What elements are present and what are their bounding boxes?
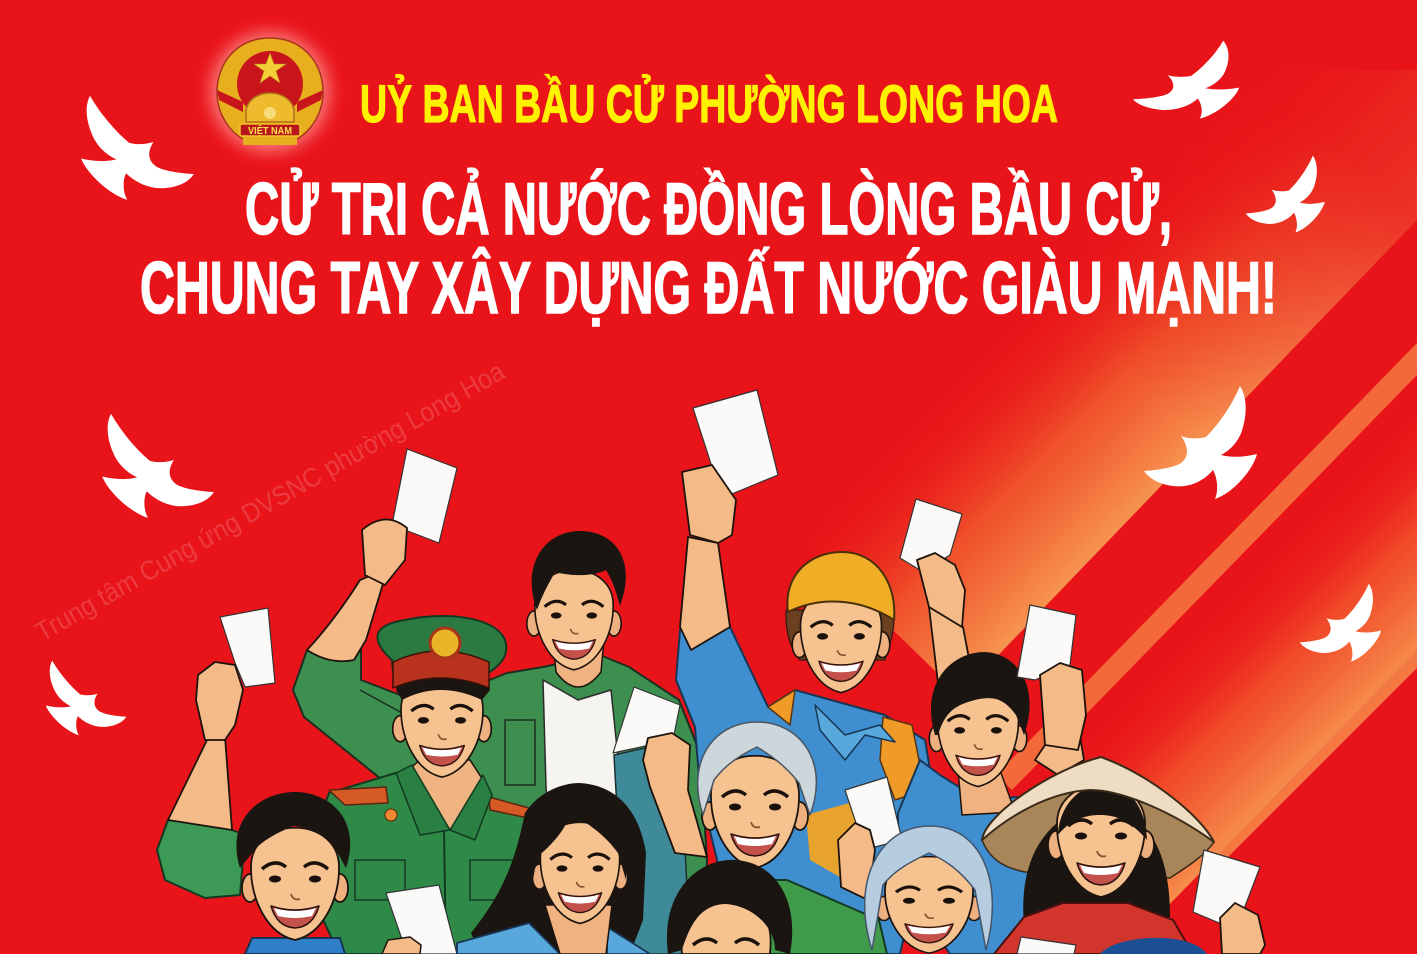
person: young man in green jacket — [293, 519, 707, 954]
person: man in blue shirt — [898, 652, 1084, 954]
card — [900, 499, 962, 572]
forearm and hand of young man — [643, 733, 707, 857]
hand — [382, 937, 421, 954]
doves — [40, 41, 1381, 735]
card — [392, 449, 457, 543]
person: worker with yellow hard hat — [676, 465, 975, 954]
illustration: voters raising ballots — [157, 390, 1265, 954]
card — [1193, 850, 1260, 930]
card — [1017, 937, 1076, 954]
person: young woman — [457, 783, 650, 954]
title — [140, 169, 1277, 329]
person: soldier — [157, 616, 552, 954]
icon: national emblem — [210, 32, 330, 152]
hand — [1220, 903, 1265, 954]
person: older woman — [865, 826, 992, 953]
person: older man — [698, 722, 887, 954]
card — [845, 777, 902, 847]
person: young man at left — [236, 792, 350, 954]
person: front young man — [667, 860, 792, 954]
card — [1017, 605, 1076, 680]
card — [220, 608, 275, 687]
hand — [838, 823, 875, 900]
hand — [1040, 663, 1086, 750]
card — [386, 885, 457, 954]
card — [693, 390, 778, 498]
watermark: Trung tâm Cung ứng DVSNC phường Long Hoa — [30, 356, 510, 647]
icon: national emblem: VIỆT NAM — [248, 124, 292, 137]
background — [842, 70, 1417, 904]
heading: committee name: UỶ BAN BẦU CỬ PHƯỜNG LONG HOA — [360, 74, 1058, 134]
person: woman with conical hat — [982, 757, 1214, 954]
card — [613, 687, 680, 753]
